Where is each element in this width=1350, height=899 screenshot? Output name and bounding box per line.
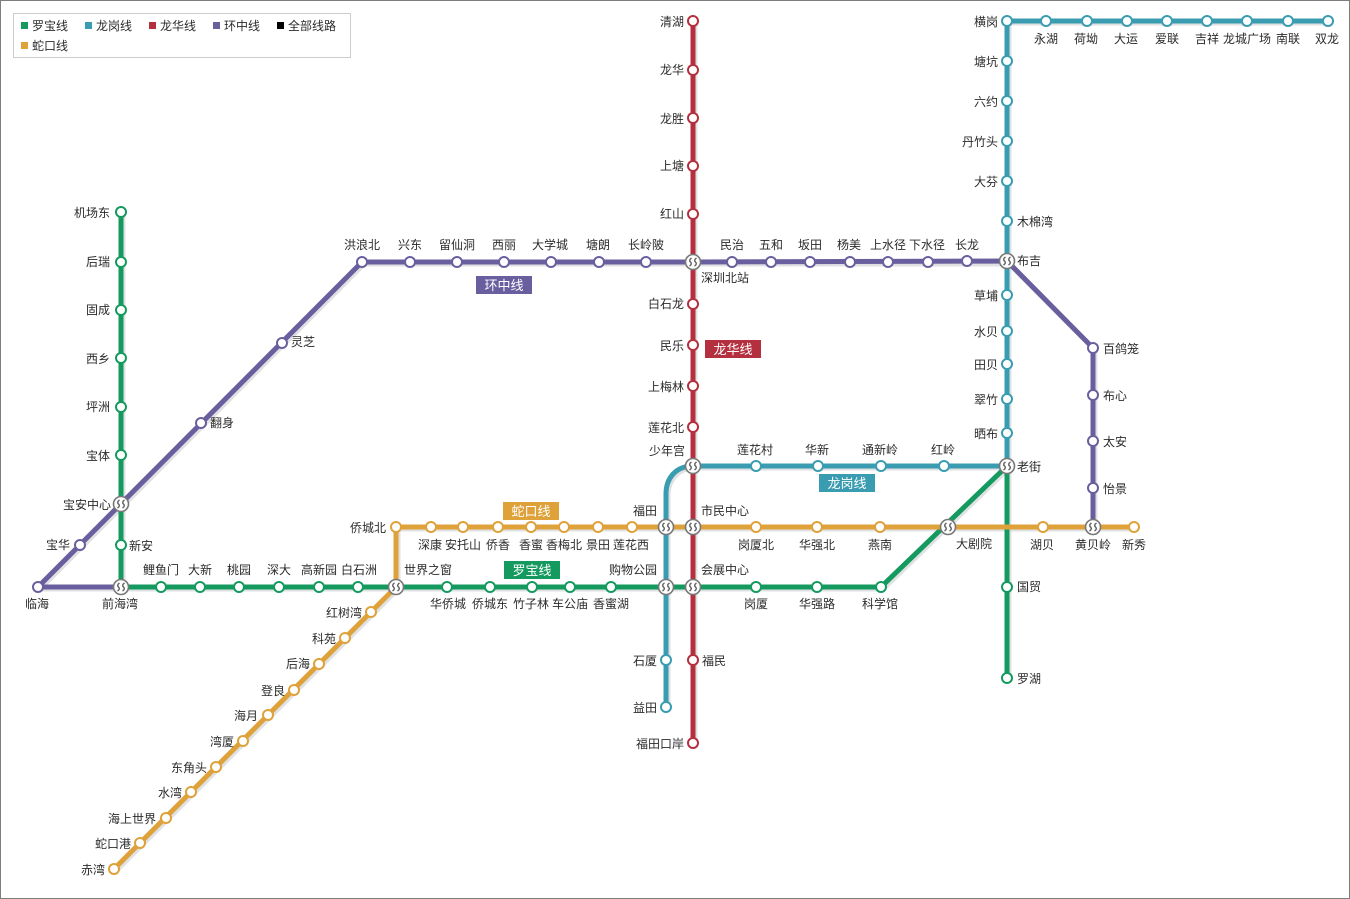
station: 香蜜湖 — [593, 582, 629, 611]
station: 民治 — [720, 238, 744, 267]
station: 坪洲: 坪洲 — [86, 400, 110, 414]
station: 草埔 — [974, 289, 1012, 303]
station: 龙胜: 龙胜 — [660, 111, 684, 126]
station: 长龙: 长龙 — [955, 238, 979, 252]
station: 红树湾 — [326, 605, 376, 620]
station: 大运: 大运 — [1114, 32, 1138, 46]
station: 下水径: 下水径 — [909, 238, 945, 252]
interchange: 购物公园: 购物公园 — [609, 562, 657, 577]
station: 赤湾 — [81, 862, 119, 877]
station: 龙城广场 — [1223, 16, 1271, 46]
station: 国贸: 国贸 — [1017, 580, 1041, 594]
station: 吉祥: 吉祥 — [1195, 32, 1219, 46]
station: 灵芝: 灵芝 — [291, 334, 315, 349]
legend: 罗宝线 — [32, 19, 68, 33]
station: 双龙: 双龙 — [1315, 32, 1339, 46]
station: 红岭: 红岭 — [931, 442, 955, 457]
station: 太安: 太安 — [1103, 434, 1127, 449]
station: 华侨城: 华侨城 — [430, 597, 466, 611]
station: 塘坑 — [974, 54, 1012, 69]
station: 莲花村: 莲花村 — [737, 442, 773, 457]
station: 永湖 — [1034, 16, 1058, 46]
station: 布心: 布心 — [1103, 389, 1127, 403]
interchange: 老街 — [1000, 458, 1041, 474]
station: 红山 — [660, 206, 698, 221]
station: 坂田: 坂田 — [798, 238, 822, 252]
station: 鲤鱼门 — [143, 562, 179, 592]
line tag: 龙岗线 — [819, 474, 875, 492]
station: 灵芝 — [277, 334, 315, 349]
interchange: 大剧院: 大剧院 — [956, 537, 992, 551]
station: 鲤鱼门: 鲤鱼门 — [143, 562, 179, 577]
station: 坪洲 — [86, 400, 126, 414]
station: 深大: 深大 — [267, 563, 291, 577]
station: 翻身 — [196, 415, 234, 430]
station: 五和 — [759, 238, 783, 267]
station: 香蜜 — [519, 522, 543, 552]
station: 白石洲: 白石洲 — [341, 562, 377, 577]
interchange: 前海湾 — [102, 580, 138, 611]
station: 新安 — [116, 538, 153, 553]
station: 荷坳 — [1074, 16, 1098, 46]
station: 景田: 景田 — [586, 538, 610, 552]
station: 翠竹 — [974, 393, 1012, 407]
station: 莲花北: 莲花北 — [648, 420, 684, 435]
station: 莲花西 — [613, 522, 649, 552]
line tag: 环中线: 环中线 — [484, 278, 524, 293]
station: 登良 — [261, 683, 299, 698]
station: 宝华: 宝华 — [46, 538, 70, 552]
station: 西乡: 西乡 — [86, 352, 110, 366]
station: 临海: 临海 — [25, 596, 49, 611]
station: 高新园: 高新园 — [301, 562, 337, 577]
station: 木棉湾: 木棉湾 — [1017, 214, 1053, 229]
interchange: 老街: 老街 — [1017, 460, 1041, 474]
station: 百鸽笼 — [1088, 341, 1139, 356]
station: 草埔: 草埔 — [974, 289, 998, 303]
station: 福田口岸: 福田口岸 — [636, 736, 684, 751]
station: 大新 — [188, 562, 212, 592]
station: 海上世界: 海上世界 — [108, 811, 156, 826]
station: 龙城广场: 龙城广场 — [1223, 32, 1271, 46]
station: 怡景 — [1088, 482, 1127, 496]
interchange: 市民中心 — [686, 503, 749, 534]
interchange: 黄贝岭: 黄贝岭 — [1075, 538, 1111, 552]
interchange: 深圳北站: 深圳北站 — [701, 271, 749, 285]
legend: 全部线路 — [288, 18, 336, 33]
station: 宝华 — [46, 538, 85, 552]
interchange: 会展中心 — [686, 562, 749, 594]
station: 长岭陂: 长岭陂 — [628, 237, 664, 252]
station: 上梅林: 上梅林 — [648, 379, 684, 394]
station: 塘朗 — [586, 237, 610, 267]
station: 杨美 — [837, 237, 861, 267]
station: 后瑞: 后瑞 — [86, 255, 110, 269]
station: 湖贝 — [1030, 522, 1054, 552]
station: 怡景: 怡景 — [1103, 482, 1127, 496]
station: 西丽 — [492, 238, 516, 267]
station: 西乡 — [86, 352, 126, 366]
station: 水贝: 水贝 — [974, 325, 998, 339]
station: 深康 — [418, 522, 442, 552]
station: 清湖 — [660, 14, 698, 29]
station: 侨香: 侨香 — [486, 538, 510, 552]
station: 白石洲 — [341, 562, 377, 592]
station: 科学馆 — [862, 582, 898, 611]
station: 太安 — [1088, 434, 1127, 449]
legend: 龙华线 — [160, 19, 196, 33]
interchange: 宝安中心: 宝安中心 — [63, 497, 111, 512]
station: 蛇口港 — [95, 836, 145, 851]
station: 华强路 — [799, 582, 835, 611]
station: 布心 — [1088, 389, 1127, 403]
station: 华新 — [805, 442, 829, 471]
station: 莲花村 — [737, 442, 773, 471]
station: 科苑 — [312, 632, 350, 646]
station: 兴东: 兴东 — [398, 238, 422, 252]
interchange: 大剧院 — [940, 520, 992, 551]
station: 吉祥 — [1195, 16, 1219, 46]
station: 石厦 — [633, 654, 671, 668]
station: 罗湖 — [1002, 671, 1041, 686]
station: 荷坳: 荷坳 — [1074, 32, 1098, 46]
interchange: 宝安中心 — [63, 496, 128, 512]
station: 桃园: 桃园 — [227, 562, 251, 577]
station: 东角头: 东角头 — [171, 761, 207, 775]
interchange: 布吉: 布吉 — [1017, 254, 1041, 268]
station: 竹子林: 竹子林 — [513, 597, 549, 611]
station: 后瑞 — [86, 255, 126, 269]
station: 新秀 — [1122, 522, 1146, 552]
station: 水湾 — [158, 785, 196, 800]
station: 莲花北 — [648, 420, 698, 435]
station: 田贝: 田贝 — [974, 358, 998, 372]
station: 晒布 — [974, 427, 1012, 441]
station: 蛇口港: 蛇口港 — [95, 836, 131, 851]
station: 安托山: 安托山 — [445, 537, 481, 552]
station: 通新岭 — [862, 442, 898, 471]
station: 岗厦北 — [738, 522, 774, 552]
line tag: 罗宝线: 罗宝线 — [512, 563, 552, 578]
station: 大芬 — [974, 175, 1012, 189]
station: 侨城东: 侨城东 — [472, 597, 508, 611]
station: 车公庙: 车公庙 — [552, 596, 588, 611]
station: 田贝 — [974, 358, 1012, 372]
station: 民乐 — [660, 339, 698, 353]
legend: 蛇口线 — [32, 38, 68, 53]
station: 新秀: 新秀 — [1122, 537, 1146, 552]
station: 五和: 五和 — [759, 238, 783, 252]
interchange: 布吉 — [1000, 254, 1041, 268]
station: 香蜜: 香蜜 — [519, 537, 543, 552]
interchange: 少年宫: 少年宫 — [649, 443, 685, 458]
station: 机场东 — [74, 206, 126, 220]
station: 南联: 南联 — [1276, 31, 1300, 46]
station: 六约: 六约 — [974, 94, 998, 109]
station: 晒布: 晒布 — [974, 427, 998, 441]
station: 湾厦: 湾厦 — [210, 734, 234, 749]
station: 新安: 新安 — [129, 538, 153, 553]
station: 杨美: 杨美 — [837, 237, 861, 252]
station: 龙华: 龙华 — [660, 63, 684, 77]
station: 岗厦 — [744, 582, 768, 611]
station: 白石龙 — [648, 296, 698, 311]
station: 洪浪北: 洪浪北 — [344, 237, 380, 252]
line tag: 龙华线 — [705, 340, 761, 358]
station: 下水径 — [909, 238, 945, 267]
station: 后海 — [286, 656, 324, 671]
station: 罗湖: 罗湖 — [1017, 671, 1041, 686]
station: 上塘: 上塘 — [660, 158, 684, 173]
station: 兴东 — [398, 238, 422, 267]
station: 侨城东 — [472, 582, 508, 611]
line: 龙华线 — [636, 14, 726, 751]
station: 坂田 — [798, 238, 822, 267]
station: 莲花西: 莲花西 — [613, 537, 649, 552]
station: 大芬: 大芬 — [974, 175, 998, 189]
station: 深康: 深康 — [418, 537, 442, 552]
station: 南联 — [1276, 16, 1300, 46]
legend — [14, 14, 350, 58]
station: 侨香 — [486, 522, 510, 552]
station: 益田 — [633, 701, 671, 715]
station: 红树湾: 红树湾 — [326, 605, 362, 620]
interchange: 世界之窗: 世界之窗 — [404, 563, 452, 577]
station: 岗厦: 岗厦 — [744, 597, 768, 611]
station: 湖贝: 湖贝 — [1030, 537, 1054, 552]
station: 留仙洞 — [439, 238, 475, 267]
station: 上塘 — [660, 158, 698, 173]
station: 双龙 — [1315, 16, 1339, 46]
station: 香蜜湖: 香蜜湖 — [593, 596, 629, 611]
station: 科苑: 科苑 — [312, 632, 336, 646]
interchange: 福田 — [633, 503, 674, 534]
station: 翠竹: 翠竹 — [974, 393, 998, 407]
station: 长龙 — [955, 238, 979, 266]
station: 华侨城 — [430, 582, 466, 611]
station: 固成: 固成 — [86, 303, 110, 317]
station: 湾厦 — [210, 734, 248, 749]
station: 水贝 — [974, 325, 1012, 339]
station: 景田 — [586, 522, 610, 552]
station: 大学城 — [532, 237, 568, 267]
station: 大新: 大新 — [188, 562, 212, 577]
station: 百鸽笼: 百鸽笼 — [1103, 341, 1139, 356]
station: 大学城: 大学城 — [532, 237, 568, 252]
line: 环中线 — [25, 237, 1139, 611]
legend: 龙岗线 — [96, 19, 132, 33]
station: 石厦: 石厦 — [633, 654, 657, 668]
station: 华强北: 华强北 — [799, 538, 835, 552]
station: 华新: 华新 — [805, 442, 829, 457]
station: 红岭 — [931, 442, 955, 471]
station: 永湖: 永湖 — [1034, 31, 1058, 46]
station: 水湾: 水湾 — [158, 785, 182, 800]
station: 长岭陂 — [628, 237, 664, 267]
interchange stations — [63, 254, 1111, 611]
station: 六约 — [974, 94, 1012, 109]
station: 通新岭: 通新岭 — [862, 442, 898, 457]
station: 丹竹头: 丹竹头 — [962, 135, 998, 149]
station: 上水径 — [870, 238, 906, 267]
station: 科学馆: 科学馆 — [862, 596, 898, 611]
station: 香梅北 — [546, 522, 582, 552]
station: 翻身: 翻身 — [210, 415, 234, 430]
station: 西丽: 西丽 — [492, 238, 516, 252]
station: 益田: 益田 — [633, 701, 657, 715]
station: 燕南: 燕南 — [868, 537, 892, 552]
station: 高新园 — [301, 562, 337, 592]
interchange: 世界之窗 — [388, 563, 452, 594]
station: 木棉湾 — [1002, 214, 1053, 229]
line: 龙岗线 — [633, 15, 1339, 715]
station: 桃园 — [227, 562, 251, 592]
interchange: 会展中心: 会展中心 — [701, 562, 749, 577]
interchange: 黄贝岭 — [1075, 520, 1111, 552]
station: 塘朗: 塘朗 — [586, 237, 610, 252]
station: 爱联: 爱联 — [1155, 32, 1179, 46]
station: 国贸 — [1002, 580, 1041, 594]
station: 海月: 海月 — [234, 708, 258, 723]
line tag: 龙华线: 龙华线 — [713, 342, 753, 357]
station: 福民: 福民 — [702, 653, 726, 668]
station: 横岗: 横岗 — [974, 15, 998, 29]
station: 华强路: 华强路 — [799, 596, 835, 611]
station: 固成 — [86, 303, 126, 317]
station: 华强北 — [799, 522, 835, 552]
station: 车公庙 — [552, 582, 588, 611]
station: 清湖: 清湖 — [660, 14, 684, 29]
station: 深大 — [267, 563, 291, 592]
interchange: 前海湾: 前海湾 — [102, 596, 138, 611]
station: 侨城北: 侨城北 — [350, 521, 386, 535]
station: 民治: 民治 — [720, 238, 744, 252]
station: 燕南 — [868, 522, 892, 552]
station: 横岗 — [974, 15, 1012, 29]
station: 塘坑: 塘坑 — [974, 54, 998, 69]
station: 香梅北: 香梅北 — [546, 537, 582, 552]
station: 民乐: 民乐 — [660, 339, 684, 353]
station: 红山: 红山 — [660, 206, 684, 221]
line tag: 蛇口线 — [503, 502, 559, 520]
interchange: 少年宫 — [649, 443, 700, 474]
station: 临海 — [25, 582, 49, 611]
interchange: 购物公园 — [609, 562, 674, 594]
station: 登良: 登良 — [261, 683, 285, 698]
station: 大运 — [1114, 16, 1138, 46]
station: 机场东: 机场东 — [74, 206, 110, 220]
station: 龙华 — [660, 63, 698, 77]
line tag: 龙岗线: 龙岗线 — [827, 476, 867, 491]
station: 洪浪北 — [344, 237, 380, 267]
line: 蛇口线 — [81, 521, 1146, 877]
station: 上梅林 — [648, 379, 698, 394]
line tag: 环中线 — [476, 276, 532, 294]
interchange: 深圳北站 — [686, 254, 749, 285]
station: 赤湾: 赤湾 — [81, 862, 105, 877]
station: 竹子林 — [513, 582, 549, 611]
line tag: 蛇口线: 蛇口线 — [511, 504, 551, 519]
station: 海月 — [234, 708, 273, 723]
station: 岗厦北: 岗厦北 — [738, 538, 774, 552]
interchange: 市民中心: 市民中心 — [701, 503, 749, 518]
station: 安托山 — [445, 522, 481, 552]
station: 后海: 后海 — [286, 656, 310, 671]
line: 罗宝线 — [74, 206, 1041, 686]
legend: 环中线 — [224, 18, 260, 33]
station: 宝体: 宝体 — [86, 449, 110, 463]
line tag: 罗宝线 — [504, 561, 560, 579]
station: 宝体 — [86, 449, 126, 463]
interchange: 福田: 福田 — [633, 503, 657, 518]
station: 白石龙: 白石龙 — [648, 296, 684, 311]
station: 上水径: 上水径 — [870, 238, 906, 252]
station: 爱联 — [1155, 16, 1179, 46]
station: 龙胜 — [660, 111, 698, 126]
station: 留仙洞: 留仙洞 — [439, 238, 475, 252]
station: 福民 — [688, 653, 726, 668]
